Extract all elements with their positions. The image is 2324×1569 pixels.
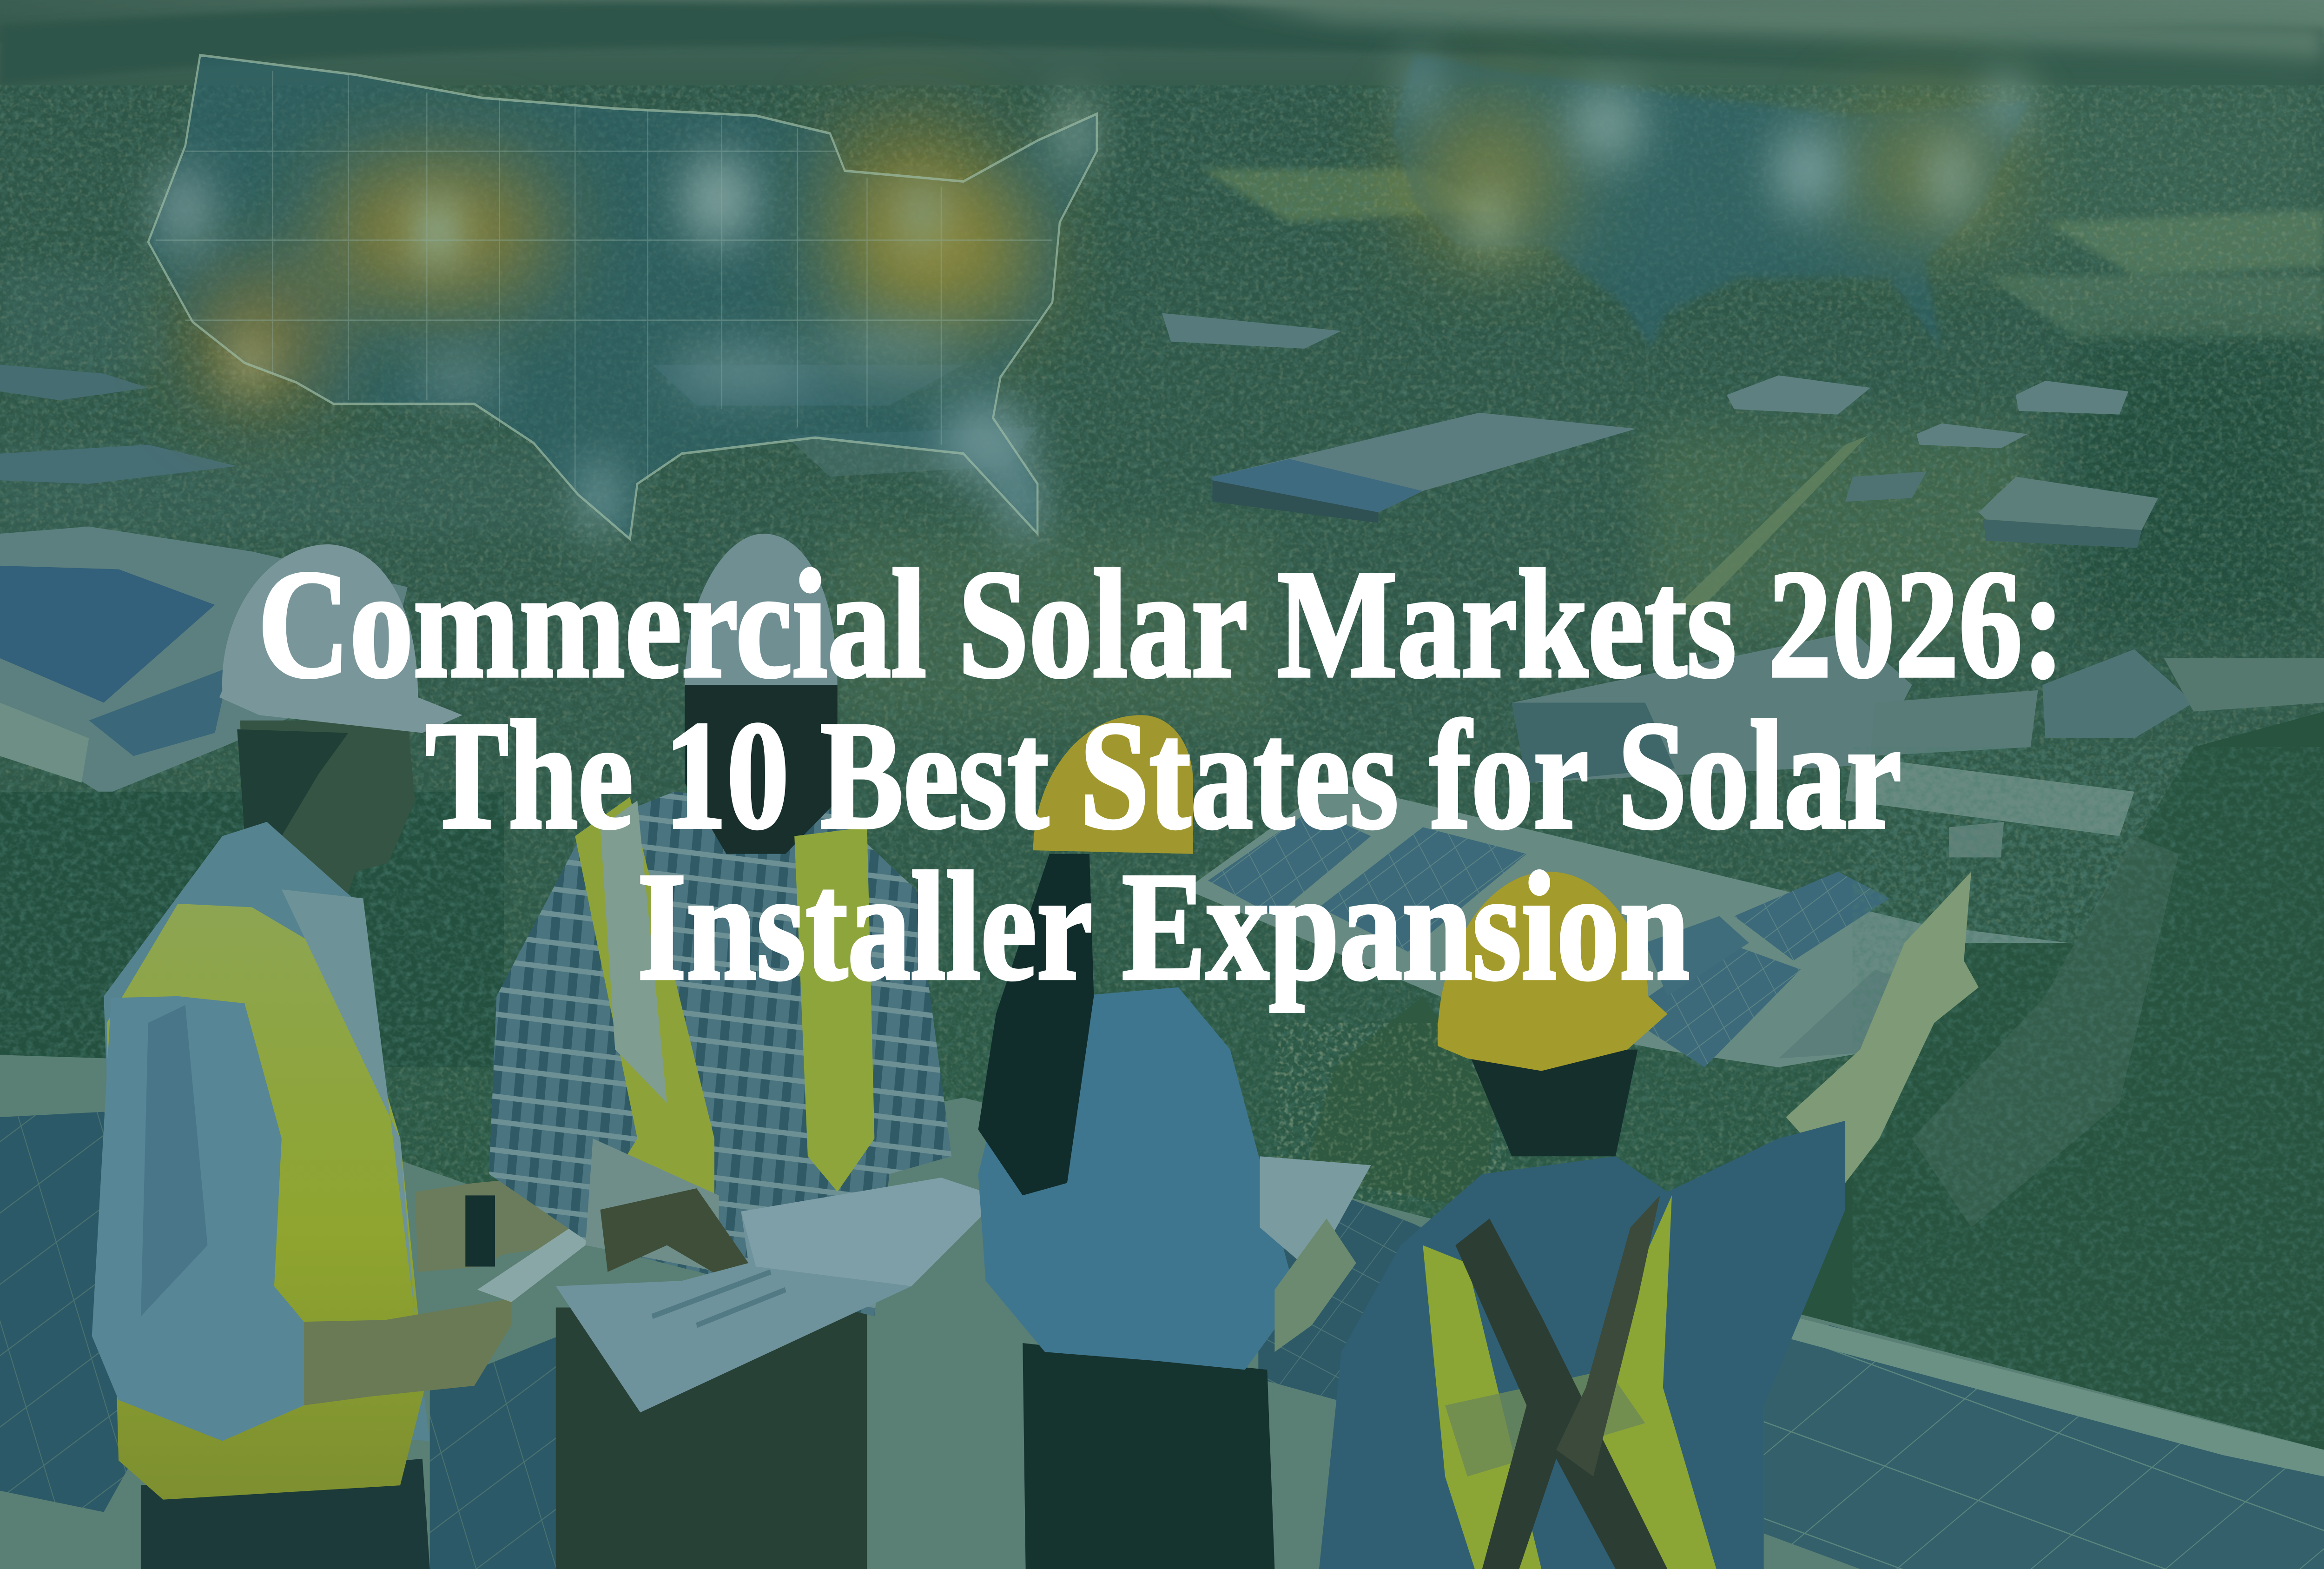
forearm skin [304,1298,511,1405]
shirt front strip [282,889,415,1317]
shirt torso [104,822,430,1441]
blueprint [556,1178,1000,1412]
worker 4: man pointing with yellow helmet [1319,872,1979,1569]
head [1467,1050,1638,1156]
title [258,539,2065,1012]
safety harness straps [1455,1218,1667,1569]
plaid shirt [489,792,951,1317]
title line 1: Commercial Solar Markets 2026: [258,539,2065,710]
worker 3: woman with yellow helmet and tablet [978,715,1371,1569]
pants [1023,1343,1274,1569]
yellow helmet [1033,715,1193,854]
blue shirt [978,987,1297,1370]
amber haze [1406,110,2016,245]
title line 3: Installer Expansion [637,841,1690,1012]
white-blue light blooms [156,98,1092,539]
large warehouse [1212,413,1636,523]
worker 2: man in plaid shirt with blueprint [489,534,1000,1569]
background: sky and distant hills [0,0,2324,160]
white helmet [219,544,462,733]
title line 2: The 10 Best States for Solar [425,690,1901,861]
wristwatch [465,1195,495,1266]
hi-vis vest [107,904,425,1500]
hand [600,1188,748,1284]
road [1678,436,1868,605]
tablet [477,1183,660,1302]
panel: glowing United States map on the left [148,55,1097,539]
grey helmet [685,534,838,685]
background: aerial landscape and forest [0,53,2324,1224]
vest stripes [575,797,714,1245]
pointing arm [1786,872,1979,1183]
panels: right [1764,1325,2324,1569]
panel: warehouse rooftops in middle distance [0,313,2324,857]
pants [141,1459,430,1569]
amber glow [193,139,1037,391]
left distant roofs [0,364,148,400]
neck and head [240,721,415,934]
worker 1: man with white helmet and tablet [92,544,660,1569]
yellow helmet [1438,872,1667,1071]
pants [556,1307,867,1569]
map grid lines [156,71,1052,489]
map outline [148,55,1097,539]
hair [978,854,1094,1195]
roof edge strip [1786,1317,2324,1476]
panel: solar arrays behind the workers [1186,783,2067,1067]
blue shirt [1319,1121,1845,1569]
roof base [0,1055,2324,1569]
panel: right foreground forest [1274,712,2324,1450]
map fill [148,55,1097,539]
sleeve arm [92,996,304,1441]
head [685,676,838,854]
arm and tablet [1260,1156,1371,1272]
panel: faded United States map on the right [1392,55,2029,347]
light blooms [1402,57,2027,245]
panel: rooftop with solar panels [0,1055,2324,1569]
hi-vis vest [1423,1195,1717,1569]
panel: left solar field [0,527,408,795]
factory roofs near horizon centre [1512,631,1912,783]
panel: left foreground trees [0,792,504,1067]
panels: left [0,1112,252,1512]
panels: centre [1258,1195,1423,1405]
